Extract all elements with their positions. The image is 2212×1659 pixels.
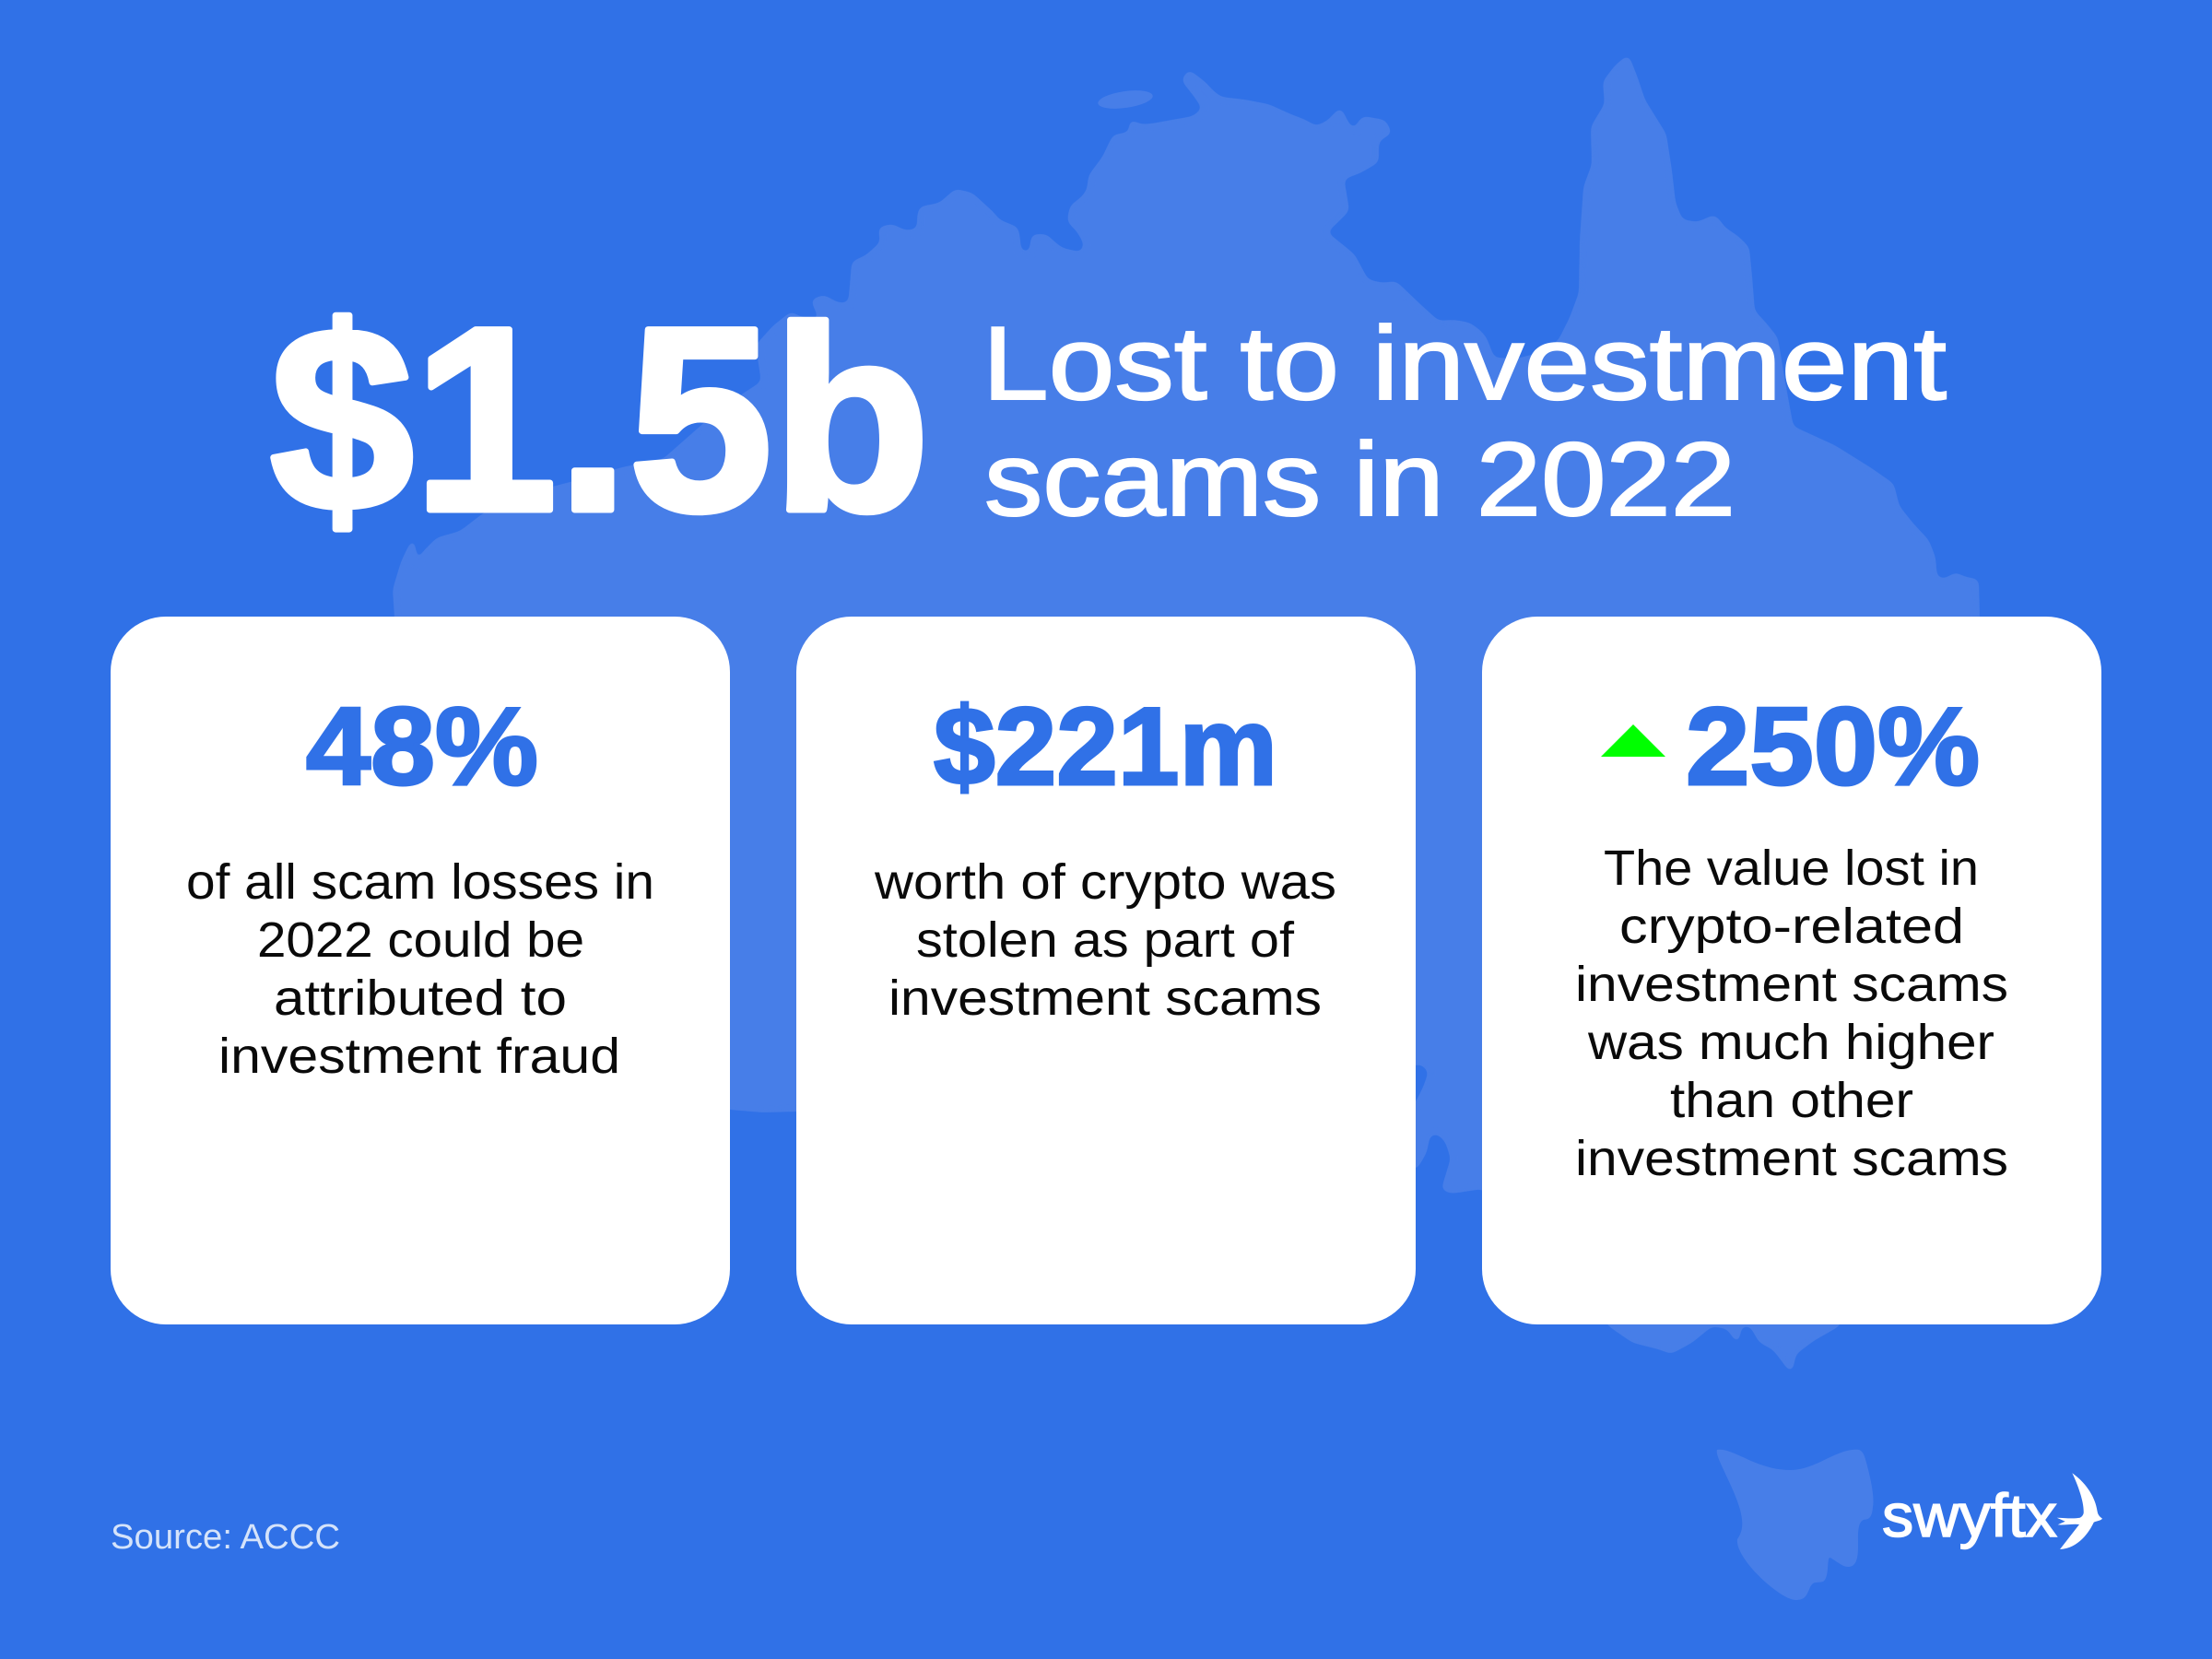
card background (796, 617, 1416, 1324)
Tasmania (1717, 1450, 1874, 1600)
description: of all scam losses in (186, 854, 654, 910)
description: stolen as part of (916, 912, 1295, 968)
Melville Island (1097, 88, 1154, 112)
icon: green up triangle (1601, 724, 1665, 757)
headline (982, 305, 1947, 537)
panel: 48% card (111, 617, 730, 1324)
description: The value lost in (1604, 841, 1979, 896)
card background (111, 617, 730, 1324)
description: 2022 could be (257, 912, 584, 968)
description: investment fraud (218, 1029, 620, 1084)
description: worth of crypto was (874, 854, 1336, 910)
description: attributed to (274, 971, 567, 1026)
headline line 2: scams in 2022 (984, 421, 1735, 537)
description: than other (1670, 1073, 1913, 1128)
source note: Source: ACCC (111, 1518, 340, 1557)
headline line 1: Lost to investment (982, 305, 1947, 421)
description: investment scams (888, 971, 1322, 1026)
panel: $221m card (796, 617, 1416, 1324)
description: investment scams (1575, 1131, 2008, 1186)
logo: swyftx (1882, 1473, 2102, 1549)
big stat: $1.5b: $1.5b (270, 274, 930, 566)
description: investment scams (1575, 957, 2008, 1012)
mainland Australia (394, 57, 1978, 1371)
description (186, 854, 654, 1084)
stat: $221m: $221m (934, 685, 1277, 808)
card background (1482, 617, 2101, 1324)
stat: 250%: 250% (1686, 685, 1980, 808)
icon: swift bird (2057, 1473, 2102, 1549)
description: crypto-related (1619, 899, 1964, 954)
description: was much higher (1587, 1015, 1994, 1070)
panel: 250% card (1482, 617, 2101, 1324)
logo wordmark: swyftx (1882, 1481, 2057, 1549)
stat: 48%: 48% (306, 685, 538, 808)
map of Australia (394, 57, 1978, 1600)
description (874, 854, 1336, 1026)
description (1575, 841, 2008, 1186)
